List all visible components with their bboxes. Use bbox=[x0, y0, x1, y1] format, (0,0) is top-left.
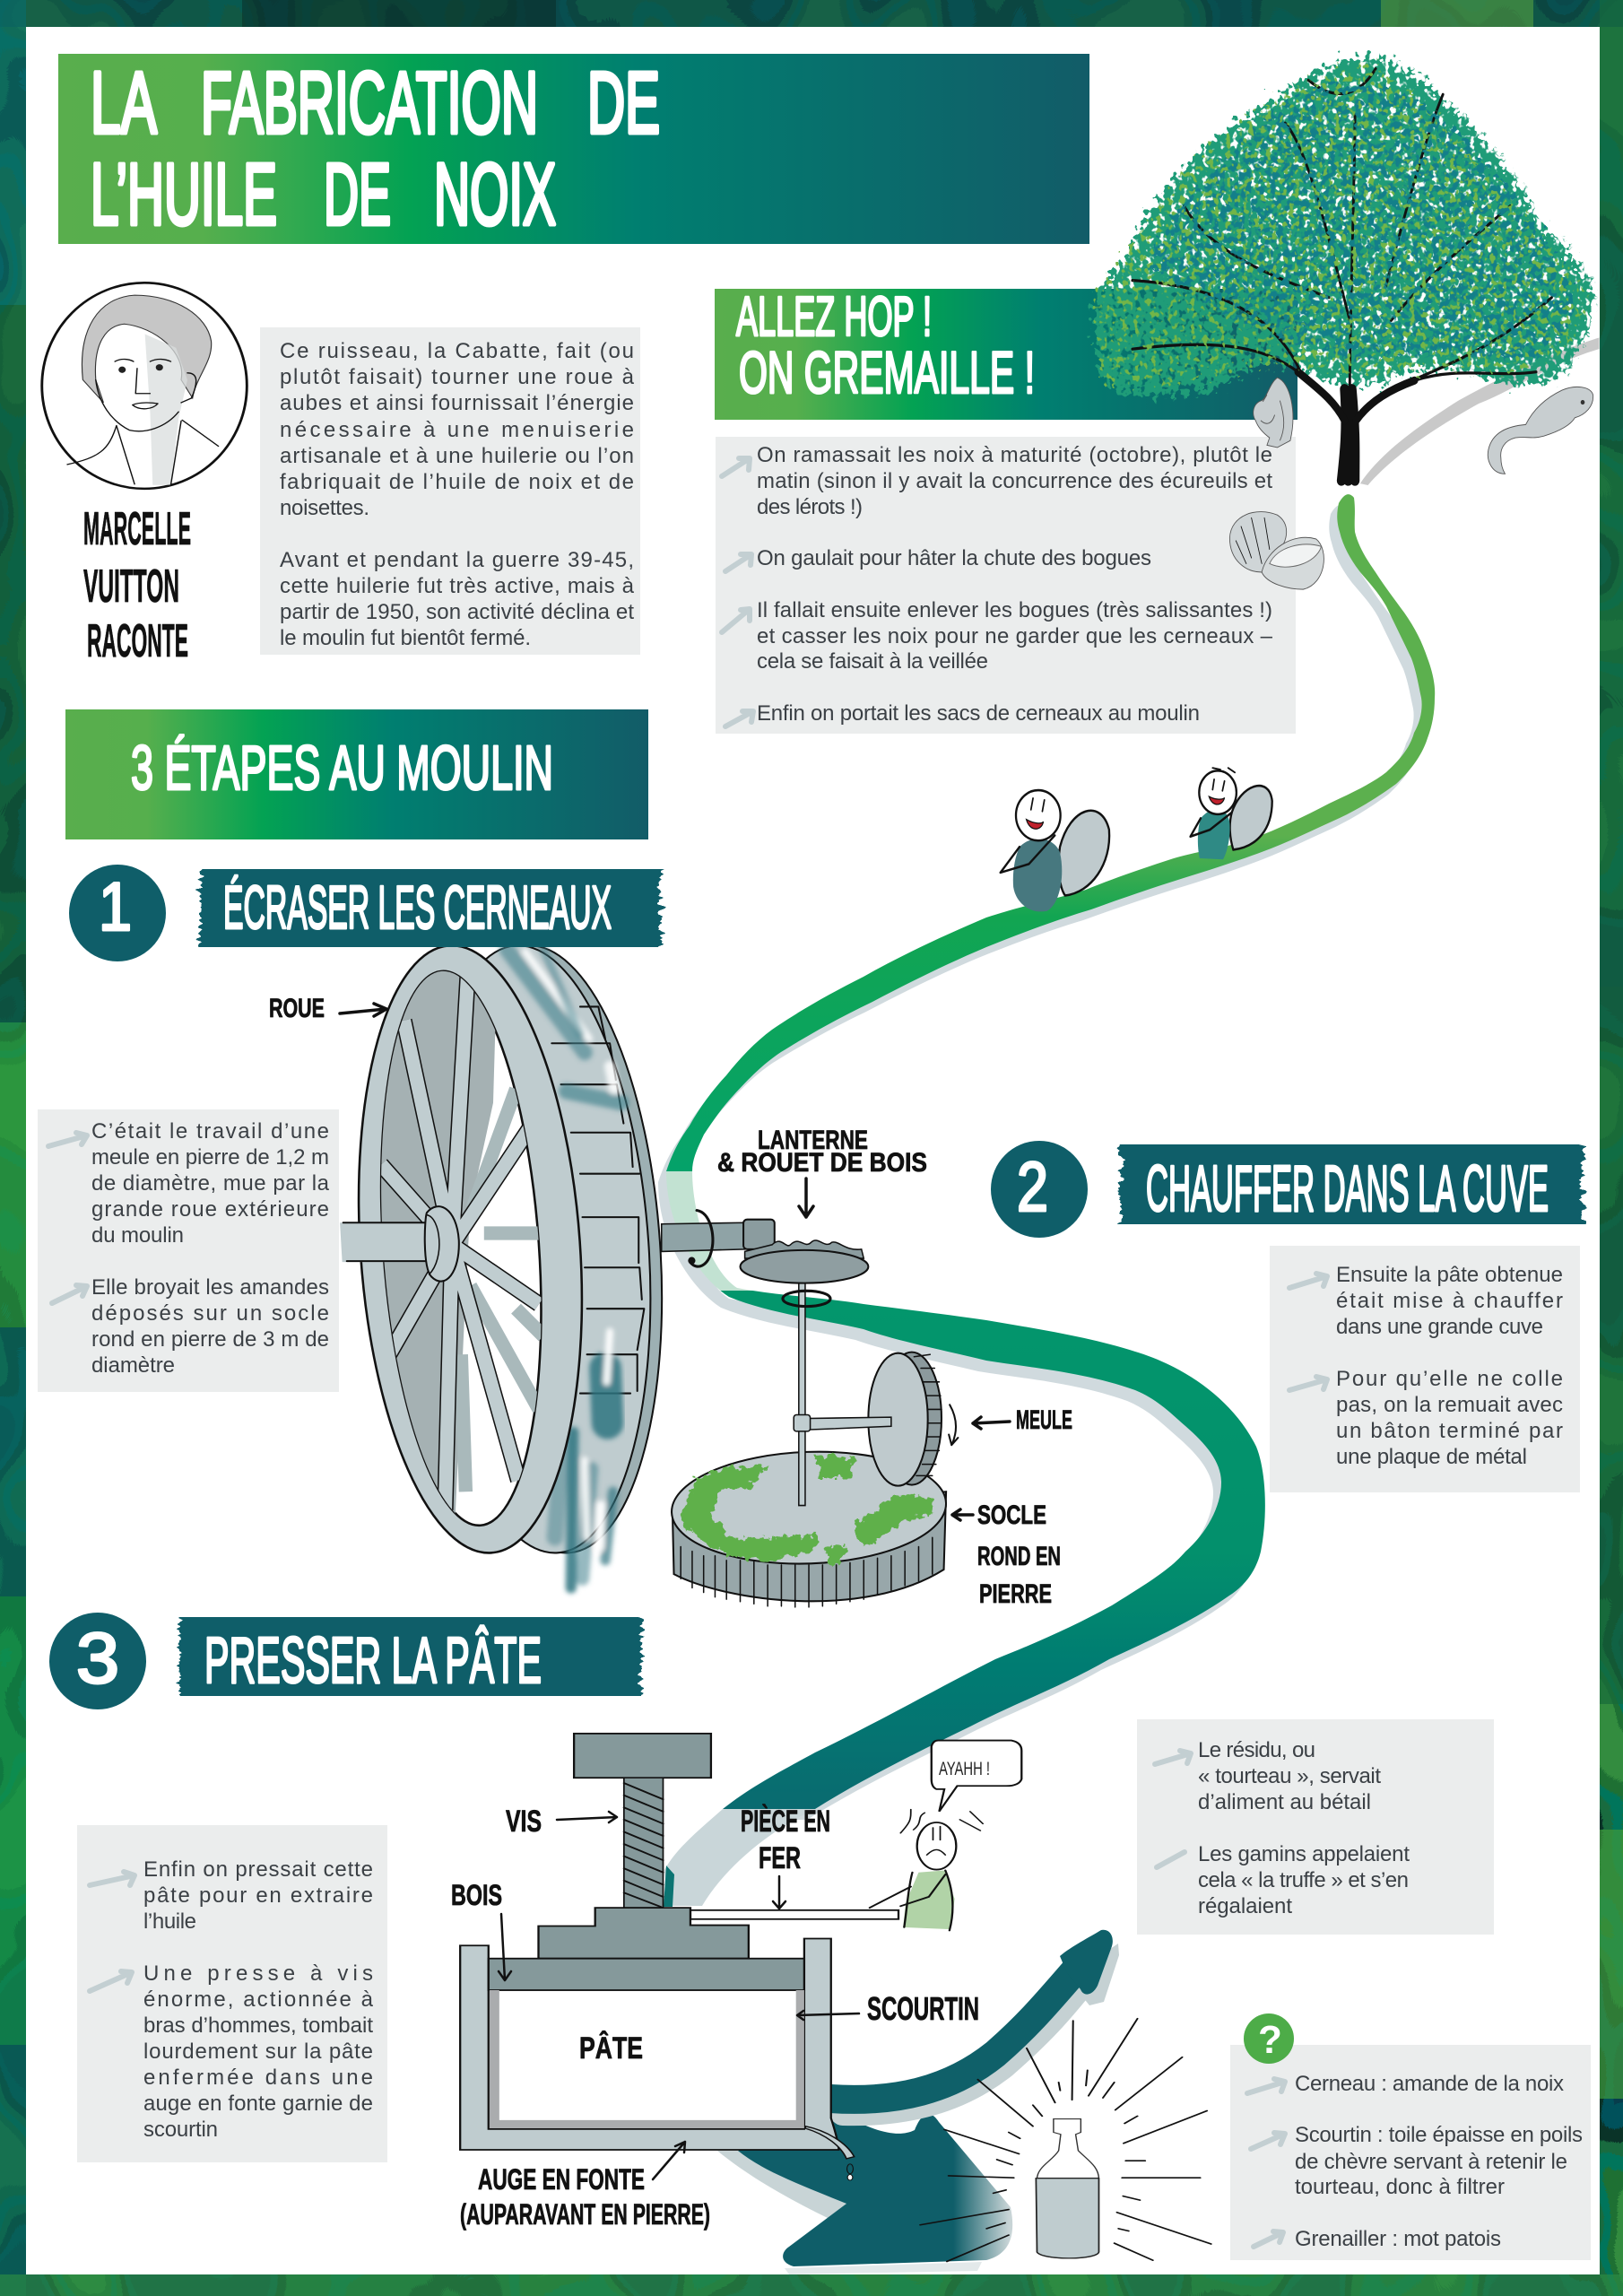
panel: step 1 text: C’était le travail d’une bbox=[91, 1119, 329, 1144]
oil spout bbox=[805, 2126, 855, 2159]
lantern disc bbox=[741, 1250, 868, 1283]
panel: step 3 text: auge en fonte garnie de bbox=[143, 2092, 373, 2116]
step 3 number bbox=[49, 1613, 146, 1709]
panel: step 2 text: pas, on la remuait avec bbox=[1336, 1393, 1563, 1417]
panel: step 1 text: diamètre bbox=[91, 1353, 175, 1378]
step 3 number: 3 bbox=[76, 1618, 119, 1698]
base stone top bbox=[670, 1448, 948, 1569]
label: socle rond en pierre: SOCLE bbox=[977, 1500, 1046, 1530]
panel: testimony text: Avant et pendant la guerre 39-45, bbox=[280, 548, 634, 572]
text: RACONTE bbox=[87, 615, 188, 667]
panel: step 1 text: grande roue extérieure bbox=[91, 1197, 329, 1222]
label: vis bbox=[506, 1805, 617, 1839]
panel: step 2 text bbox=[1270, 1246, 1580, 1492]
oil in bottle bbox=[1036, 2179, 1098, 2258]
panel: gathering walnuts: Enfin on portait les sacs de cerneaux au moulin bbox=[757, 701, 1200, 726]
person carrying sack, right bbox=[1191, 768, 1272, 859]
wheel spokes bbox=[381, 970, 542, 1514]
label: scourtin: SCOURTIN bbox=[867, 1990, 979, 2027]
label: auge en fonte: AUGE EN FONTE bbox=[478, 2163, 645, 2196]
rotation arrow on axle bbox=[690, 1210, 713, 1266]
panel: step 3 text: Une presse à vis bbox=[143, 1961, 373, 1986]
step 2 number bbox=[991, 1141, 1088, 1238]
tree shadow bbox=[1360, 337, 1599, 485]
oil bottle with light rays bbox=[920, 2019, 1211, 2262]
panel: step 2 text: dans une grande cuve bbox=[1336, 1315, 1543, 1339]
panel: testimony text: nécessaire à une menuiserie bbox=[280, 418, 634, 442]
step 1 banner bbox=[200, 869, 661, 947]
panel: step 2 text: Ensuite la pâte obtenue bbox=[1336, 1263, 1563, 1287]
question mark icon bbox=[1244, 2013, 1294, 2064]
panel: testimony text: partir de 1950, son activité déclina et bbox=[280, 600, 634, 624]
panel: gathering walnuts: On ramassait les noix à maturité (octobre), plutôt le bbox=[757, 443, 1272, 467]
panel: step 3 text bbox=[77, 1825, 387, 2162]
panel: gathering walnuts: matin (sinon il y avait la concurrence des écureuils et bbox=[757, 469, 1272, 493]
panel: testimony text: le moulin fut bientôt fermé. bbox=[280, 626, 531, 650]
banner: Allez hop bbox=[715, 286, 1298, 420]
panel: residue text bbox=[1137, 1719, 1494, 1935]
millstone bbox=[882, 1352, 942, 1485]
river ribbon: green path from tree to mill bbox=[666, 494, 1435, 1171]
wheel front rim bbox=[340, 938, 601, 1561]
panel: testimony text: fabriquait de l’huile de noix et de bbox=[280, 470, 634, 494]
upper water bbox=[507, 950, 621, 1103]
tree crown: base foliage bbox=[1094, 57, 1594, 395]
arrow bullets bbox=[1155, 1751, 1191, 1867]
squirrel bbox=[1254, 378, 1293, 448]
horizontal arm bbox=[802, 1417, 891, 1430]
river ribbon shadow bbox=[658, 505, 1427, 1820]
title text: L’HUILE bbox=[91, 145, 277, 243]
speech text: AYAHH ! bbox=[939, 1759, 990, 1779]
label: pièce en fer: FER bbox=[759, 1841, 801, 1875]
panel: residue text: Les gamins appelaient bbox=[1198, 1842, 1410, 1866]
vertical shaft bbox=[799, 1276, 805, 1506]
rotation ring on shaft bbox=[783, 1291, 830, 1307]
panel: gathering walnuts: On gaulait pour hâter la chute des bogues bbox=[757, 546, 1151, 570]
panel: glossary: de chèvre servant à retenir le bbox=[1295, 2150, 1567, 2174]
upper arrow from press bbox=[830, 1930, 1119, 2112]
panel: testimony text bbox=[260, 327, 640, 655]
name: Marcelle Vuitton raconte bbox=[83, 503, 191, 667]
label: socle rond en pierre: PIERRE bbox=[979, 1579, 1052, 1609]
label: pièce en fer: PIÈCE EN bbox=[741, 1805, 830, 1839]
label: pâte: PÂTE bbox=[579, 2031, 643, 2066]
tree crown: teal foliage bbox=[1148, 88, 1572, 366]
person carrying sack, left bbox=[1001, 790, 1109, 911]
rotation arrow on millstone bbox=[949, 1405, 958, 1445]
arrow bullets bbox=[90, 1872, 135, 1991]
label: socle rond en pierre bbox=[952, 1500, 1061, 1609]
water wheel bbox=[340, 938, 958, 1607]
scourtin lining bbox=[490, 1990, 804, 2128]
screw bbox=[624, 1778, 663, 1908]
label: auge en fonte: (AUPARAVANT EN PIERRE) bbox=[460, 2198, 710, 2231]
panel: step 3 text: pâte pour en extraire bbox=[143, 1883, 373, 1908]
panel: glossary: tourteau, donc à filtrer bbox=[1295, 2175, 1505, 2199]
panel: step 3 text: Enfin on pressait cette bbox=[143, 1857, 373, 1882]
wooden plate bbox=[489, 1959, 804, 1990]
panel: gathering walnuts: cela se faisait à la veillée bbox=[757, 649, 988, 674]
panel: step 2 text: un bâton terminé par bbox=[1336, 1419, 1563, 1443]
lower water bbox=[555, 1332, 613, 1587]
gear teeth bbox=[745, 1240, 864, 1258]
arrow bullets bbox=[48, 1133, 87, 1303]
panel: step 3 text: scourtin bbox=[143, 2118, 218, 2142]
label: meule bbox=[973, 1405, 1072, 1435]
panel: step 1 text: du moulin bbox=[91, 1223, 184, 1248]
wheel tread bbox=[404, 938, 670, 1561]
person at the lever bbox=[870, 1810, 983, 1930]
title banner bbox=[58, 54, 1089, 244]
panel: glossary: Grenailler : mot patois bbox=[1295, 2227, 1501, 2251]
title text: NOIX bbox=[434, 145, 556, 243]
lantern gear bbox=[743, 1220, 775, 1249]
label: roue bbox=[269, 994, 386, 1023]
step 2 number: 2 bbox=[1017, 1147, 1048, 1226]
panel: step 2 text: Pour qu’elle ne colle bbox=[1336, 1367, 1563, 1391]
panel: gathering walnuts bbox=[716, 437, 1296, 734]
walnut tree bbox=[1094, 57, 1594, 481]
trunk and branches bbox=[1133, 69, 1551, 481]
banner: 3 étapes au moulin: 3 ÉTAPES AU MOULIN bbox=[131, 733, 553, 803]
axle left bbox=[340, 1222, 427, 1262]
dormouse bbox=[1488, 387, 1593, 474]
press steps bbox=[538, 1908, 749, 1959]
label: lanterne et rouet de bois bbox=[717, 1126, 927, 1217]
speech bubble bbox=[932, 1741, 1021, 1812]
crushed kernels bbox=[681, 1455, 933, 1565]
axle right bbox=[662, 1222, 745, 1251]
panel: testimony text: cette huilerie fut très active, mais à bbox=[280, 574, 635, 598]
light rays bbox=[920, 2019, 1211, 2262]
label: bois bbox=[451, 1879, 511, 1980]
portrait of Marcelle Vuitton bbox=[42, 283, 247, 489]
oil press bbox=[460, 1734, 1021, 2180]
banner: 3 étapes au moulin bbox=[65, 709, 648, 839]
panel: glossary: Scourtin : toile épaisse en poils bbox=[1295, 2123, 1583, 2147]
banner: Allez hop: ON GREMAILLE ! bbox=[739, 339, 1035, 405]
panel: glossary bbox=[1230, 2013, 1591, 2260]
bottom arrowhead under press bbox=[717, 2110, 1012, 2274]
question mark icon: ? bbox=[1258, 2018, 1282, 2062]
panel: step 2 text: une plaque de métal bbox=[1336, 1445, 1527, 1469]
title text: DE bbox=[587, 54, 660, 152]
banner: Allez hop: ALLEZ HOP ! bbox=[736, 286, 932, 348]
panel: gathering walnuts: Il fallait ensuite enlever les bogues (très salissantes !) bbox=[757, 598, 1272, 622]
panel: residue text: d’aliment au bétail bbox=[1198, 1790, 1371, 1814]
panel: gathering walnuts: et casser les noix pour ne garder que les cerneaux – bbox=[757, 624, 1273, 648]
panel: testimony text: noisettes. bbox=[280, 496, 369, 520]
panel: step 1 text: rond en pierre de 3 m de bbox=[91, 1327, 329, 1352]
panel: step 3 text: énorme, actionnée à bbox=[143, 1987, 374, 2012]
panel: testimony text: artisanale et à une huilerie ou l’on bbox=[280, 444, 634, 468]
title text: FABRICATION bbox=[201, 54, 538, 152]
arrow bullets bbox=[1289, 1274, 1327, 1390]
panel: step 3 text: l’huile bbox=[143, 1909, 196, 1934]
river ribbon: lower band from mill to press bbox=[664, 1171, 1265, 1907]
arrow bullets bbox=[722, 458, 753, 726]
panel: step 1 text: meule en pierre de 1,2 m bbox=[91, 1145, 329, 1170]
panel: step 3 text: lourdement sur la pâte bbox=[143, 2039, 373, 2064]
panel: residue text: régalaient bbox=[1198, 1894, 1292, 1918]
label: vis: VIS bbox=[506, 1805, 542, 1839]
label: roue: ROUE bbox=[269, 994, 325, 1023]
text: MARCELLE bbox=[83, 503, 191, 555]
panel: step 3 text: bras d’hommes, tombait bbox=[143, 2013, 373, 2038]
panel: residue text: cela « la truffe » et s’en bbox=[1198, 1868, 1409, 1892]
press head bbox=[574, 1734, 711, 1778]
panel: step 1 text: de diamètre, mue par la bbox=[91, 1171, 330, 1196]
walnuts bbox=[1229, 512, 1324, 589]
pale continuation behind the screw bbox=[664, 1809, 815, 1906]
panel: glossary: Cerneau : amande de la noix bbox=[1295, 2072, 1564, 2096]
panel: testimony text: plutôt faisait) tourner une roue à bbox=[280, 365, 635, 389]
iron lever bbox=[690, 1910, 898, 1919]
label: meule: MEULE bbox=[1016, 1405, 1072, 1435]
step 1 number: 1 bbox=[99, 869, 132, 945]
title text bbox=[91, 54, 660, 243]
step 1 number bbox=[69, 865, 166, 961]
panel: testimony text: Ce ruisseau, la Cabatte, fait (ou bbox=[280, 339, 634, 363]
panel: testimony text: aubes et ainsi fournissait l’énergie bbox=[280, 391, 634, 415]
step 3 banner bbox=[179, 1617, 641, 1697]
label: lanterne et rouet de bois: & ROUET DE BOIS bbox=[717, 1148, 927, 1178]
hub bbox=[425, 1206, 459, 1282]
step 1 banner: ÉCRASER LES CERNEAUX bbox=[223, 874, 612, 942]
label: lanterne et rouet de bois: LANTERNE bbox=[758, 1126, 868, 1155]
panel: residue text: Le résidu, ou bbox=[1198, 1738, 1315, 1762]
label: auge en fonte bbox=[460, 2142, 710, 2231]
label: socle rond en pierre: ROND EN bbox=[977, 1542, 1061, 1571]
step 3 banner: PRESSER LA PÂTE bbox=[204, 1625, 542, 1697]
tree crown: light green foliage bbox=[1098, 63, 1593, 386]
panel: step 2 text: était mise à chauffer bbox=[1336, 1289, 1563, 1313]
cast-iron trough bbox=[460, 1939, 838, 2150]
panel: step 1 text bbox=[38, 1109, 339, 1392]
bottle bbox=[1037, 2119, 1098, 2258]
label: pièce en fer bbox=[741, 1805, 830, 1909]
panel: step 1 text: Elle broyait les amandes bbox=[91, 1275, 329, 1300]
title text: DE bbox=[324, 145, 391, 243]
title text: LA bbox=[91, 54, 157, 152]
name: Marcelle Vuitton raconte: VUITTON bbox=[83, 561, 179, 613]
panel: step 3 text: enfermée dans une bbox=[143, 2066, 373, 2090]
wheel opening bbox=[364, 966, 558, 1531]
wheel back rim bbox=[415, 938, 681, 1561]
panel: residue text: « tourteau », servait bbox=[1198, 1764, 1381, 1788]
label: scourtin bbox=[797, 1990, 979, 2027]
label: bois: BOIS bbox=[451, 1879, 502, 1911]
panel: step 1 text: déposés sur un socle bbox=[91, 1301, 329, 1326]
panel: gathering walnuts: des lérots !) bbox=[757, 495, 863, 519]
wheel paddles bbox=[551, 1006, 644, 1394]
arrow bullets bbox=[1247, 2079, 1285, 2247]
base stone side bbox=[673, 1492, 946, 1601]
